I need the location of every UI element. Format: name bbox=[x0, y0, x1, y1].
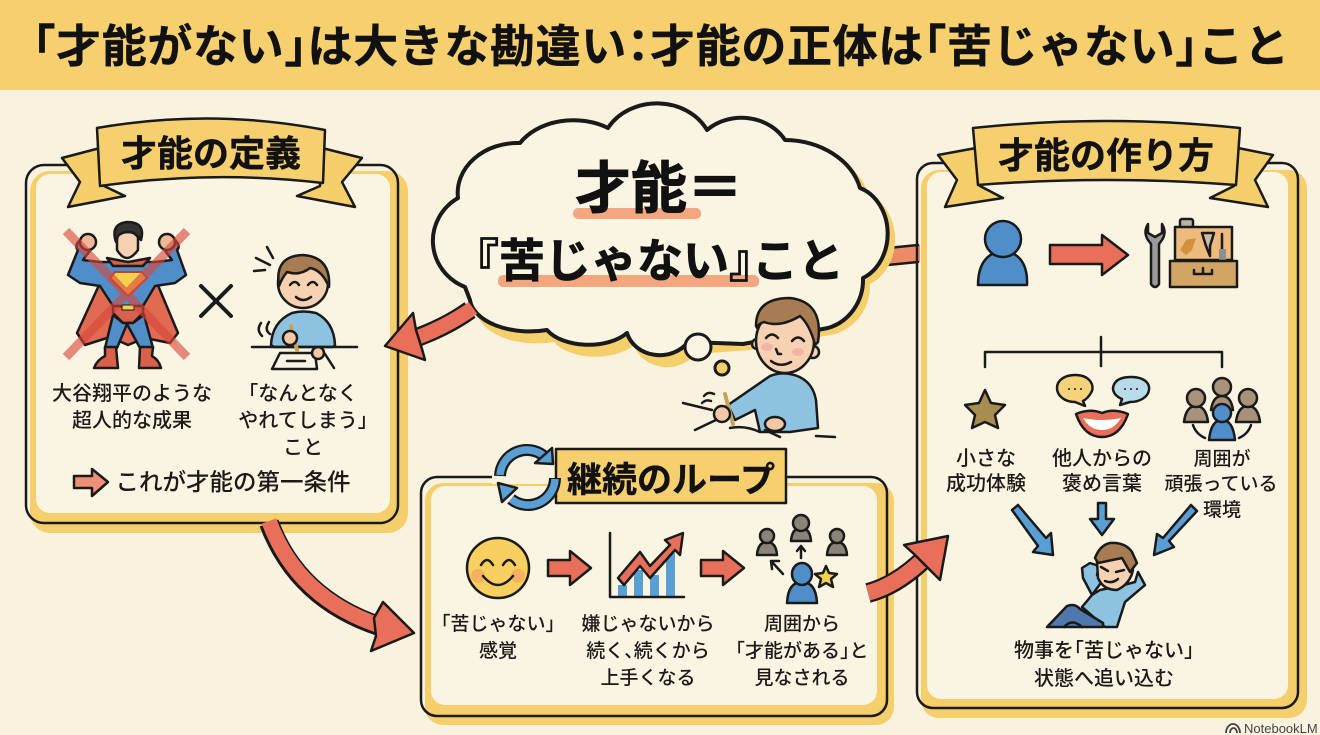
underline: not painful bbox=[498, 275, 759, 287]
icon: toolbox bbox=[1170, 219, 1237, 287]
text: somehow manages to do it: 「なんとなく bbox=[248, 383, 358, 405]
thought bubble large bbox=[685, 334, 711, 360]
icon: multiplication sign bbox=[201, 286, 231, 316]
text: drive things to not painful state: 状態へ追い込む bbox=[1034, 667, 1174, 690]
text: hard-working environment: 頑張っている bbox=[1164, 474, 1278, 495]
text: seen as talented: 周囲から bbox=[764, 614, 840, 635]
arrow: left blue to relaxed boy bbox=[1012, 505, 1053, 555]
icon: star bbox=[965, 390, 1005, 428]
text: seen as talented: 「才能がある」と bbox=[735, 641, 869, 662]
ribbon heading: definition bbox=[62, 118, 362, 207]
thought cloud bbox=[433, 103, 895, 375]
icon: circular arrows bbox=[498, 448, 555, 505]
icon: person bbox=[978, 221, 1027, 285]
cloud body bbox=[433, 103, 888, 355]
thought bubble small bbox=[715, 361, 729, 375]
text: praise: 他人からの bbox=[1052, 447, 1152, 470]
icon: group around a person bbox=[1184, 378, 1260, 440]
text: continuing and improving: 嫌じゃないから bbox=[581, 613, 715, 635]
text: hard-working environment: 周囲が bbox=[1193, 448, 1251, 470]
title banner: 「才能がない」は大きな勘違い：才能の正体は「苦じゃない」こと bbox=[33, 21, 1289, 72]
text: drive things to not painful state: 物事を「苦じゃない」 bbox=[1014, 640, 1194, 662]
text: talent equals: 才能＝ bbox=[575, 157, 743, 220]
banner heading: loop bbox=[492, 449, 786, 503]
arrow: cloud to right panel connector bbox=[878, 245, 920, 266]
text: things that are not painful: 『苦じゃない』こと bbox=[476, 235, 844, 287]
icon: smiling face bbox=[467, 538, 529, 598]
icon: recognized person among peers bbox=[757, 515, 847, 603]
arrow: outlined pointer bbox=[74, 469, 108, 496]
text: first condition of talent: これが才能の第一条件 bbox=[116, 469, 350, 495]
banner heading: loop: 継続のループ bbox=[567, 461, 775, 500]
icon: wrench bbox=[1146, 224, 1164, 287]
icon: speech bubbles and lips bbox=[1057, 375, 1149, 437]
text: not painful feeling: 感覚 bbox=[479, 640, 517, 662]
text: seen as talented: 見なされる bbox=[754, 667, 850, 689]
text: not painful feeling: 「苦じゃない」 bbox=[441, 614, 555, 635]
arrow: step one to two bbox=[548, 551, 591, 585]
panel: definition of talent bbox=[26, 118, 408, 533]
ribbon heading: how to build bbox=[938, 121, 1273, 207]
illustration: boy casually writing bbox=[252, 247, 357, 369]
illustration: boy thinking and writing bbox=[683, 298, 835, 437]
arrow: step two to three bbox=[701, 551, 744, 585]
panel: loop of continuation bbox=[421, 448, 894, 725]
arrow: right blue to relaxed boy bbox=[1154, 505, 1197, 555]
arrow: middle blue to relaxed boy bbox=[1090, 503, 1114, 535]
text: somehow manages to do it: こと bbox=[283, 437, 323, 459]
text: small success: 小さな bbox=[956, 447, 1016, 470]
illustration: relaxed boy bbox=[1047, 543, 1145, 627]
text: small success: 成功体験 bbox=[946, 472, 1026, 495]
text: praise: 褒め言葉 bbox=[1062, 472, 1142, 495]
diagram: branching bracket bbox=[985, 337, 1222, 367]
title banner bbox=[0, 0, 1320, 90]
icon: rising bar chart bbox=[610, 533, 684, 597]
illustration: crossed-out superhero bbox=[66, 222, 187, 368]
arrow: loop panel to right panel bbox=[868, 536, 948, 593]
panel: how to build talent bbox=[917, 121, 1307, 718]
arrow: left panel to loop panel bbox=[269, 521, 414, 651]
text: superhuman results: 超人的な成果 bbox=[72, 409, 192, 432]
underline: talent bbox=[573, 208, 701, 219]
ribbon heading: definition: 才能の定義 bbox=[121, 133, 301, 174]
text: continuing and improving: 続く、続くから bbox=[586, 641, 710, 662]
ribbon heading: how to build: 才能の作り方 bbox=[998, 135, 1214, 176]
text: continuing and improving: 上手くなる bbox=[600, 667, 696, 689]
text: somehow manages to do it: やれてしまう」 bbox=[238, 410, 368, 432]
arrow: cloud to left panel bbox=[385, 308, 473, 360]
text: hard-working environment: 環境 bbox=[1203, 499, 1241, 521]
text: superhuman results: 大谷翔平のような bbox=[52, 382, 212, 405]
cloud shadow bbox=[440, 109, 895, 367]
arrow: person to toolbox bbox=[1050, 235, 1128, 275]
